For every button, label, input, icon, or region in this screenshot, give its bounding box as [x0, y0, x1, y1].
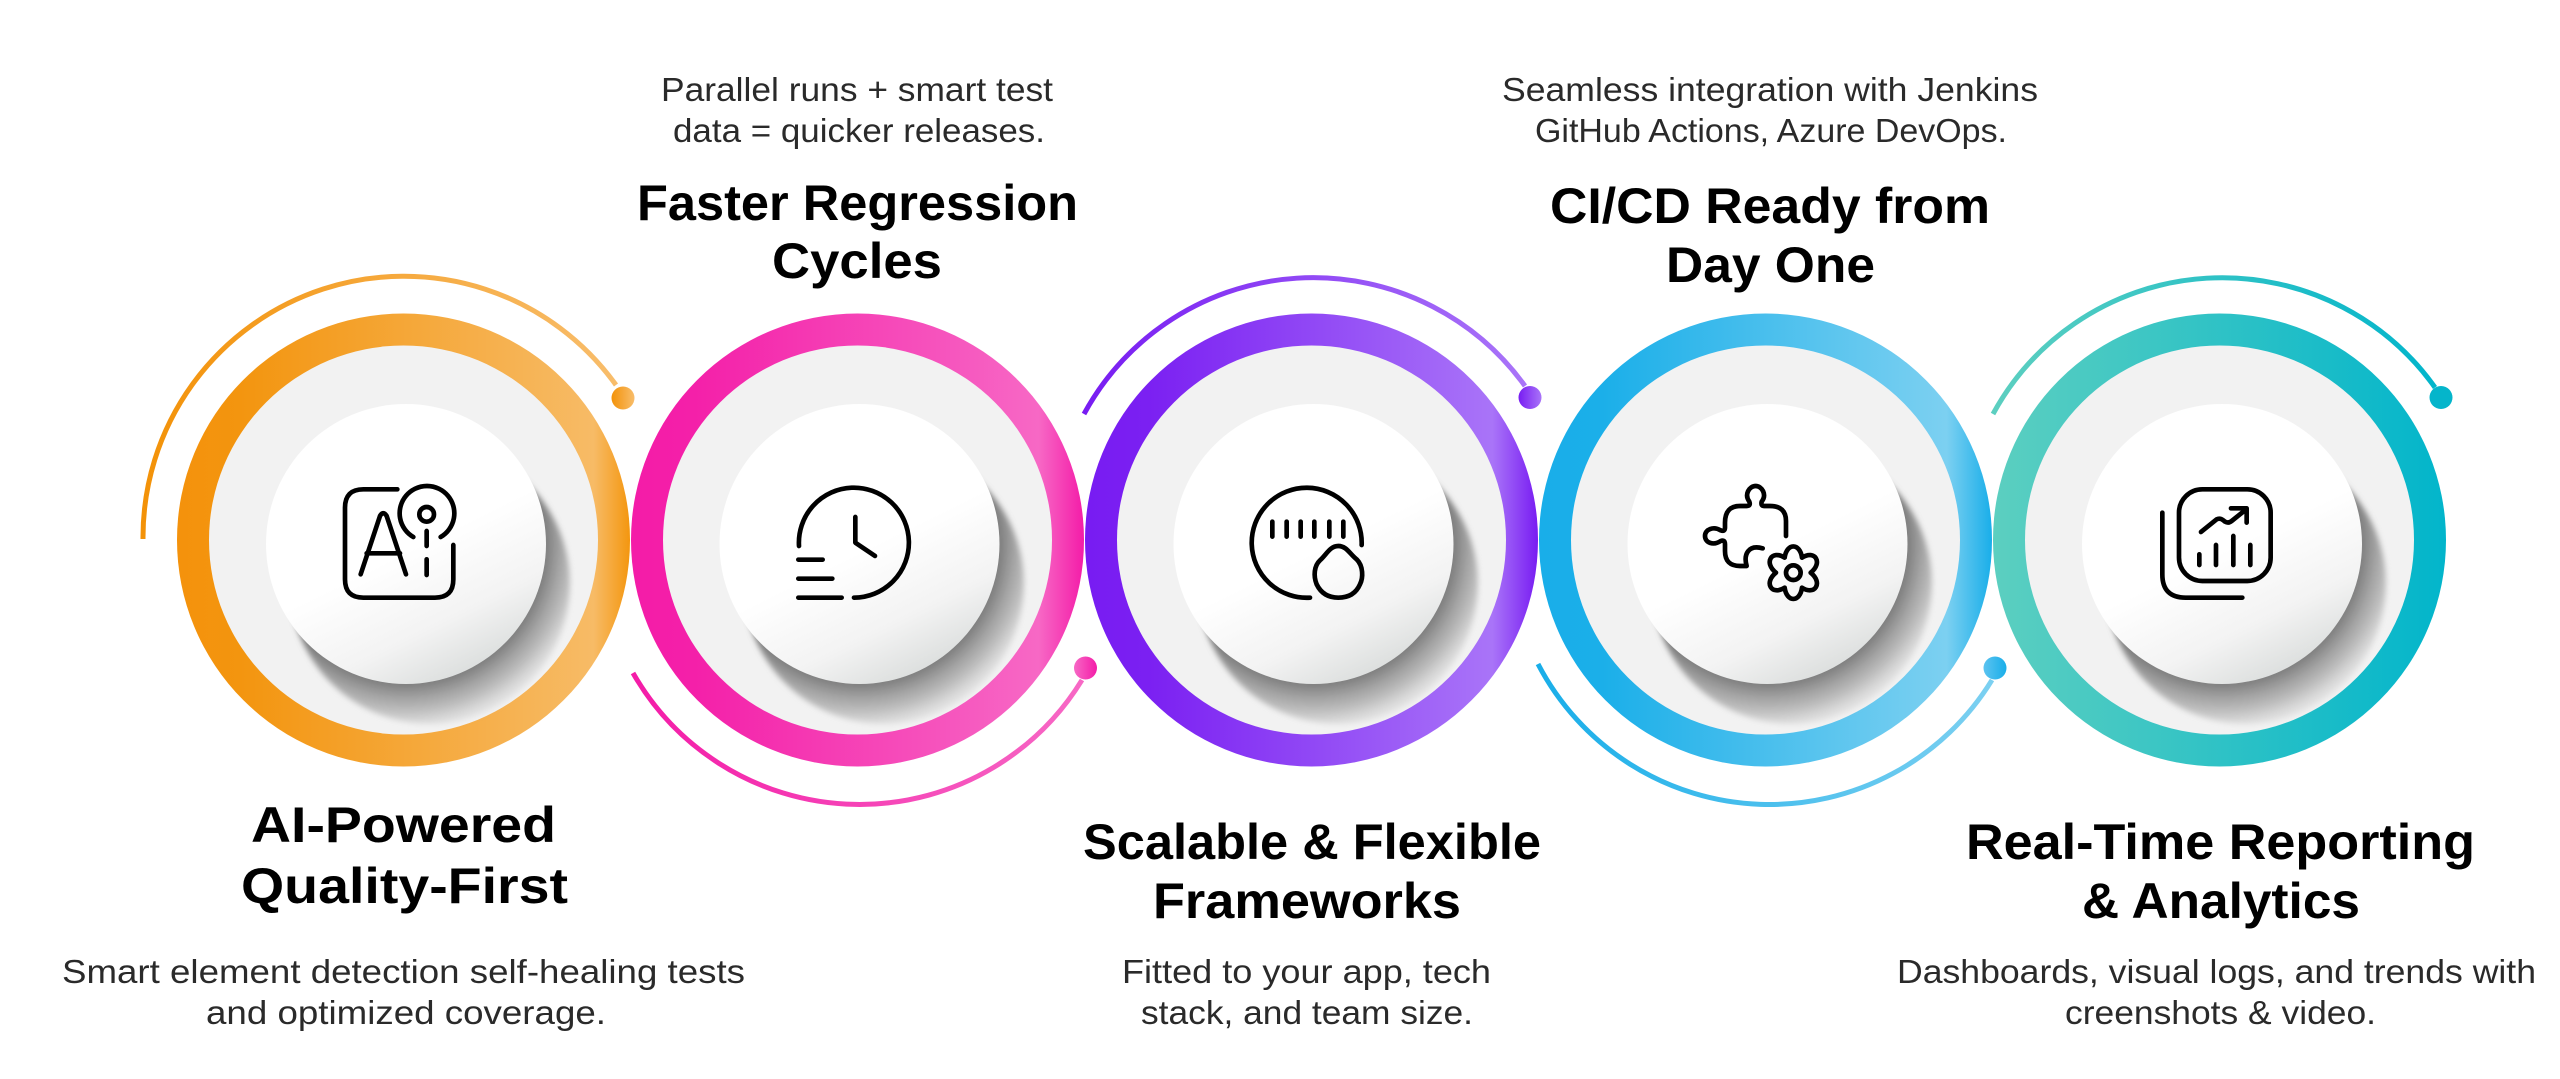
description 3: stack, and team size. [1141, 994, 1473, 1031]
heading 4: CI/CD Ready from [1550, 178, 1990, 234]
ball shadow 3 [1198, 444, 1478, 724]
ball shadow 1 [290, 444, 570, 724]
heading 2: Faster Regression [637, 175, 1078, 231]
description 4: Seamless integration with Jenkins [1502, 71, 2038, 108]
arc 2 [633, 673, 1082, 804]
step 4: CI/CD Ready from Day One [1502, 71, 2038, 805]
ring 4 [1539, 314, 1992, 766]
heading 1: AI-Powered [251, 797, 556, 853]
connector dot 2 [1074, 656, 1097, 680]
heading 4: Day One [1666, 237, 1875, 293]
inner disc 1 [209, 346, 598, 734]
step 3: Scalable & Flexible Frameworks [1083, 278, 1542, 1031]
description 1: Smart element detection self-healing tests [62, 953, 745, 990]
icon: puzzle piece and gear [1705, 486, 1817, 599]
connector dot 3 [1518, 386, 1542, 409]
ball 3 [1174, 404, 1454, 684]
ring 5 [1993, 314, 2446, 766]
description 5: creenshots & video. [2065, 994, 2376, 1031]
heading 2: Cycles [772, 233, 942, 289]
heading 3: Scalable & Flexible [1083, 814, 1541, 870]
description 3: Fitted to your app, tech [1122, 953, 1491, 990]
connector dot 5 [2430, 386, 2452, 409]
ball shadow 5 [2106, 444, 2386, 724]
ring 1 [177, 314, 630, 766]
arc 4 [1538, 664, 1992, 805]
inner disc 4 [1571, 346, 1960, 734]
icon: analytics cards [2162, 489, 2271, 598]
connector dot 1 [612, 386, 634, 410]
heading 1: Quality-First [241, 858, 568, 914]
ball 1 [266, 404, 546, 684]
heading 5: Real-Time Reporting [1966, 814, 2475, 870]
icon: fast clock [798, 488, 909, 598]
inner disc 3 [1117, 346, 1506, 734]
arc 5 [1993, 278, 2435, 414]
ball shadow 2 [744, 444, 1024, 724]
ball 2 [720, 404, 1000, 684]
description 5: Dashboards, visual logs, and trends with [1897, 953, 2536, 990]
description 2: Parallel runs + smart test [661, 71, 1053, 108]
arc 1 [143, 276, 616, 539]
ring 2 [631, 314, 1084, 766]
icon: scale gauge with drop [1252, 488, 1362, 598]
connector dot 4 [1984, 656, 2006, 680]
arc 3 [1084, 278, 1525, 414]
description 1: and optimized coverage. [206, 994, 606, 1031]
ring 3 [1085, 314, 1538, 766]
ball 4 [1628, 404, 1908, 684]
heading 5: & Analytics [2082, 873, 2360, 929]
inner disc 5 [2025, 346, 2414, 734]
ball 5 [2082, 404, 2362, 684]
ball shadow 4 [1652, 444, 1932, 724]
heading 3: Frameworks [1153, 873, 1461, 929]
step 5: Real-Time Reporting & Analytics [1897, 278, 2536, 1031]
step 1: AI-Powered Quality-First [62, 276, 745, 1031]
inner disc 2 [663, 346, 1052, 734]
description 4: GitHub Actions, Azure DevOps. [1535, 112, 2007, 149]
description 2: data = quicker releases. [673, 112, 1045, 149]
icon: AI badge [345, 486, 454, 598]
step 2: Faster Regression Cycles [631, 71, 1097, 804]
